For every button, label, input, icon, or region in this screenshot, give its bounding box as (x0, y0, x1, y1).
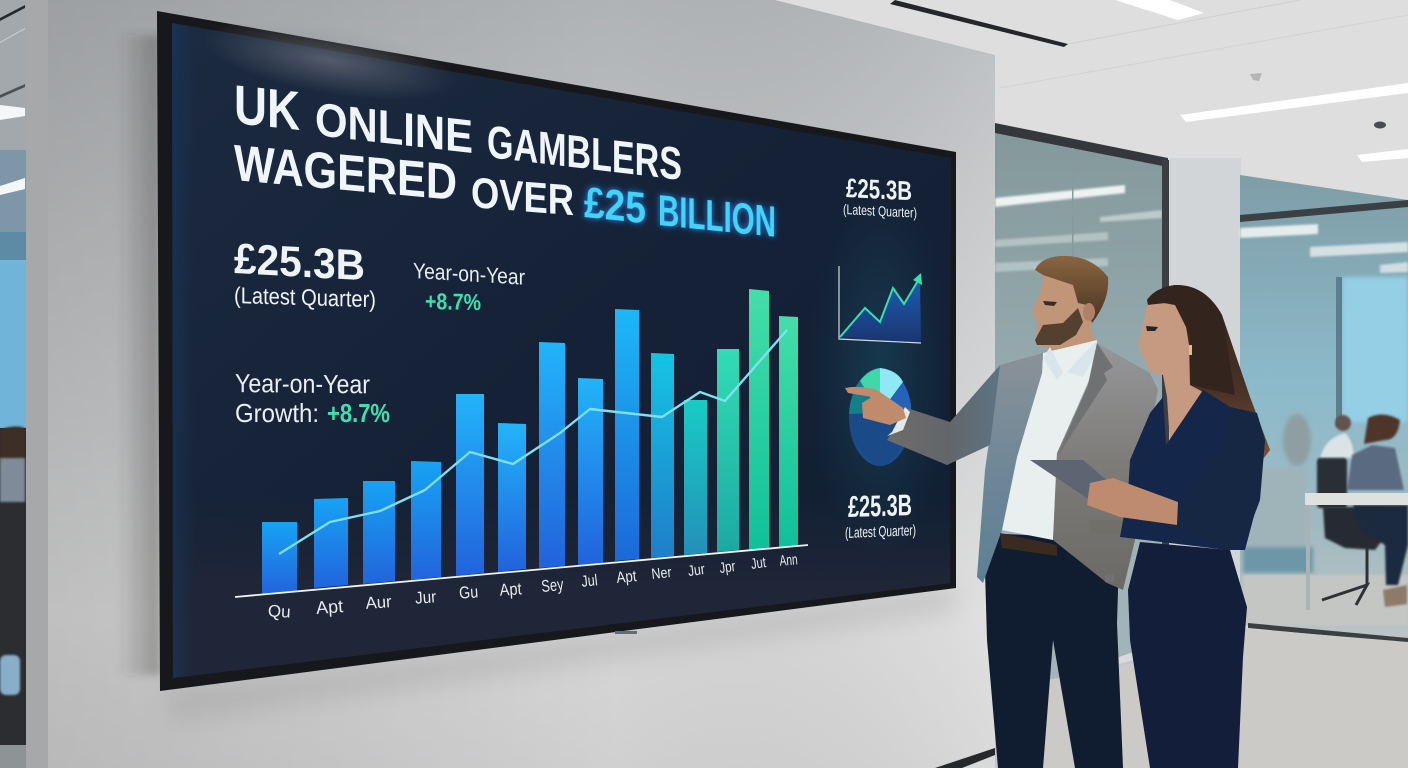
right stat: top: £25.3B (846, 173, 912, 206)
bar chart (235, 289, 808, 622)
man watch (1105, 574, 1114, 582)
man pocket flap (1090, 520, 1122, 534)
woman eye (1146, 326, 1158, 331)
woman earring (1189, 345, 1192, 355)
man eye (1043, 301, 1057, 306)
right stat: top (843, 173, 917, 221)
mini area chart (839, 266, 922, 343)
woman trousers (1128, 542, 1247, 768)
man trousers (985, 533, 1123, 768)
man pointing hand (845, 387, 906, 425)
woman sleeve (1178, 407, 1265, 550)
x axis labels: Qu (267, 601, 291, 622)
man jacket right panel (1053, 343, 1158, 590)
woman hair (1147, 285, 1270, 463)
background: ceiling (775, 0, 1408, 260)
woman hair front (1147, 285, 1235, 395)
bars (262, 289, 798, 594)
stat: year-on-year: +8.7% (425, 288, 481, 315)
x axis labels: Jul (581, 572, 598, 591)
x axis labels: Apt (499, 579, 522, 600)
stat: year-on-year growth: Growth: (235, 398, 319, 428)
man shirt collar (1043, 340, 1098, 380)
x axis labels: Aur (365, 592, 393, 613)
title: £25 (584, 178, 646, 233)
right stat: bottom: (Latest Quarter) (845, 522, 916, 542)
background: main wall (26, 0, 995, 768)
pie chart (849, 368, 911, 466)
stat: latest quarter: £25.3B (234, 235, 365, 290)
background: floor (1040, 628, 1408, 768)
title: UK (234, 73, 300, 142)
background: white pillar (1169, 158, 1241, 628)
man beard (1035, 308, 1083, 345)
person: woman with tablet (1030, 285, 1270, 768)
man shirt cuff (887, 407, 910, 436)
title: WAGERED (234, 134, 457, 211)
right stat: top: (Latest Quarter) (843, 201, 917, 221)
x axis labels: Jur (687, 561, 706, 580)
man hair (1035, 256, 1108, 323)
x axis (235, 545, 808, 597)
man neck and face (1032, 275, 1098, 372)
man jacket lapel (1057, 343, 1113, 457)
screen panel (172, 23, 951, 678)
x axis labels: Jur (414, 587, 437, 608)
man belt (1000, 533, 1057, 556)
stat: year-on-year (413, 258, 525, 315)
x axis labels: Gu (458, 582, 479, 603)
x axis labels: Apt (616, 568, 638, 587)
woman blouse (1120, 390, 1265, 550)
title (234, 73, 776, 247)
stat: year-on-year growth (235, 368, 390, 428)
x axis labels: Apt (315, 596, 344, 618)
tablet (1030, 460, 1115, 505)
background: glass partition one (995, 123, 1169, 768)
woman face and neck (1138, 302, 1203, 444)
x axis labels: Ner (651, 564, 672, 583)
x axis labels (267, 551, 798, 622)
person: man pointing at screen (845, 256, 1158, 768)
title: GAMBLERS (487, 115, 682, 190)
x axis labels: Sey (540, 575, 565, 596)
screen frame (157, 11, 956, 691)
right stat: bottom: £25.3B (848, 489, 912, 524)
x axis labels: Jpr (718, 558, 736, 577)
stat: year-on-year growth: +8.7% (327, 398, 390, 428)
woman hand and forearm (1087, 478, 1178, 525)
right stat: bottom (845, 489, 916, 542)
title: ONLINE (315, 92, 473, 163)
man ear (1083, 303, 1095, 321)
title: OVER (471, 169, 574, 225)
stat: year-on-year growth: Year-on-Year (235, 368, 370, 399)
man shirt (1002, 340, 1097, 540)
man sleeve (887, 365, 1000, 465)
stat: latest quarter: (Latest Quarter) (234, 282, 376, 312)
stat: year-on-year: Year-on-Year (413, 258, 525, 290)
trend line (279, 330, 787, 554)
x axis labels: Ann (779, 551, 798, 570)
x axis labels: Jut (750, 554, 768, 573)
title: BILLION (658, 186, 776, 247)
background: far left office (0, 0, 26, 768)
background: glass partition two (1240, 175, 1408, 643)
display screen (157, 4, 956, 691)
man jacket left panel (977, 353, 1043, 583)
